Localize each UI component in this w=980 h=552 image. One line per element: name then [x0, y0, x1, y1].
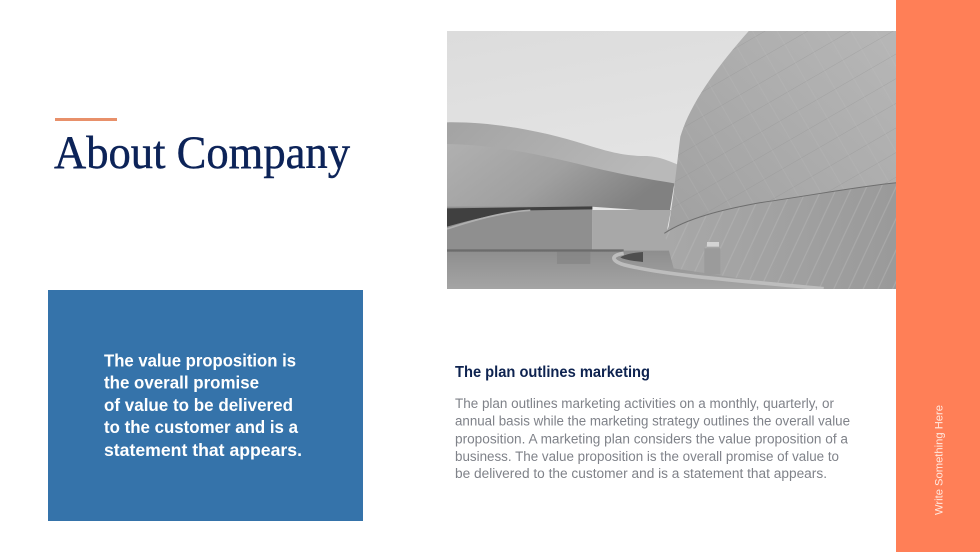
concrete wall [447, 207, 592, 252]
lower shell [664, 183, 897, 292]
value proposition text: to the customer and is a [104, 417, 298, 437]
body text: The plan outlines marketing activities on a monthly, quarterly, or [455, 396, 834, 411]
value proposition text: statement that appears. [104, 440, 302, 460]
sidebar [896, 0, 980, 552]
photo: curved building [447, 30, 897, 292]
curved band [447, 144, 674, 212]
upper shell [665, 30, 897, 234]
dark recess [620, 252, 643, 262]
body text: annual basis while the marketing strategy outlines the overall value [455, 414, 850, 428]
body text: be delivered to the customer and is a statement that appears. [455, 466, 827, 481]
panel: value proposition [48, 290, 363, 521]
door [704, 248, 720, 274]
body text: business. The value proposition is the overall promise of value to [455, 449, 839, 464]
value proposition text [104, 350, 302, 460]
water [447, 250, 806, 289]
body text [455, 396, 850, 481]
value proposition text: The value proposition is [104, 350, 296, 370]
sidebar label: Write Something Here [934, 405, 946, 515]
title: About Company [54, 127, 350, 179]
lit wall [592, 210, 671, 251]
value proposition text: the overall promise [104, 372, 259, 392]
shadow gap [447, 206, 592, 227]
curved walkway [614, 253, 824, 289]
heading: plan: The plan outlines marketing [455, 364, 650, 381]
accent line [55, 118, 117, 121]
value proposition text: of value to be delivered [104, 395, 293, 415]
body text: proposition. A marketing plan considers the value proposition of a [455, 432, 848, 446]
distant roof [447, 122, 679, 187]
